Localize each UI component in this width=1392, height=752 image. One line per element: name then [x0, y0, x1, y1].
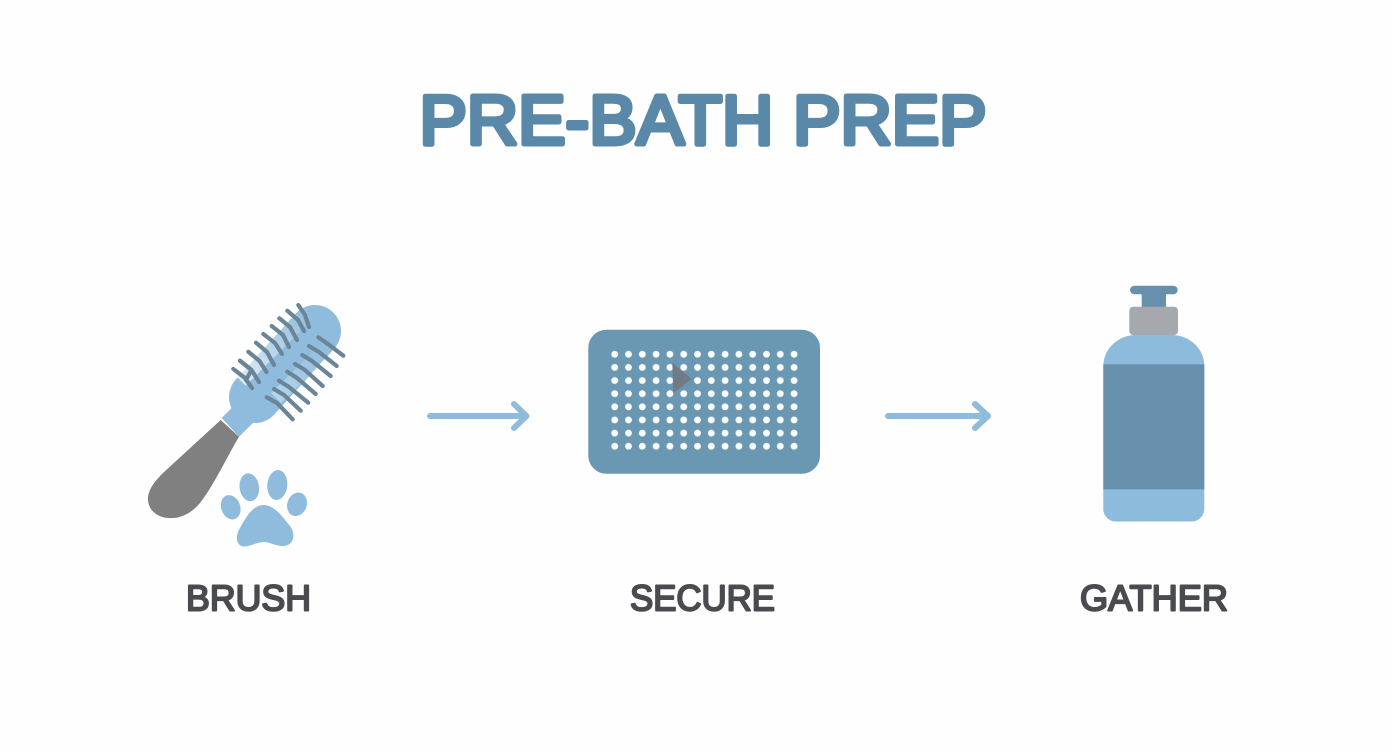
label: brush: BRUSH	[186, 578, 311, 618]
label: secure: SECURE	[630, 578, 775, 618]
brush head lower sheen	[276, 345, 330, 398]
icon: shampoo bottle	[1103, 286, 1204, 522]
arrow: brush to secure	[430, 404, 526, 428]
paw print	[217, 469, 310, 547]
bristles lower row	[267, 337, 343, 419]
pump top	[1130, 286, 1178, 294]
arrow: secure to gather	[888, 404, 988, 428]
brush neck	[222, 398, 258, 437]
bottle label	[1103, 364, 1204, 489]
icon: non-slip mat	[588, 330, 820, 474]
icon: brush with paw	[148, 305, 343, 547]
bristles upper row	[233, 305, 309, 388]
pump stem	[1142, 293, 1166, 308]
mat holes	[608, 348, 801, 453]
bottle collar	[1129, 307, 1178, 335]
mat body	[588, 330, 820, 474]
title: PRE-BATH PREP	[420, 81, 986, 159]
brush head sheen	[240, 312, 308, 380]
bottle body	[1103, 335, 1204, 522]
label: gather: GATHER	[1080, 578, 1228, 618]
brush handle	[148, 420, 239, 518]
brush head	[255, 331, 315, 397]
mat triangle marker	[672, 363, 692, 393]
